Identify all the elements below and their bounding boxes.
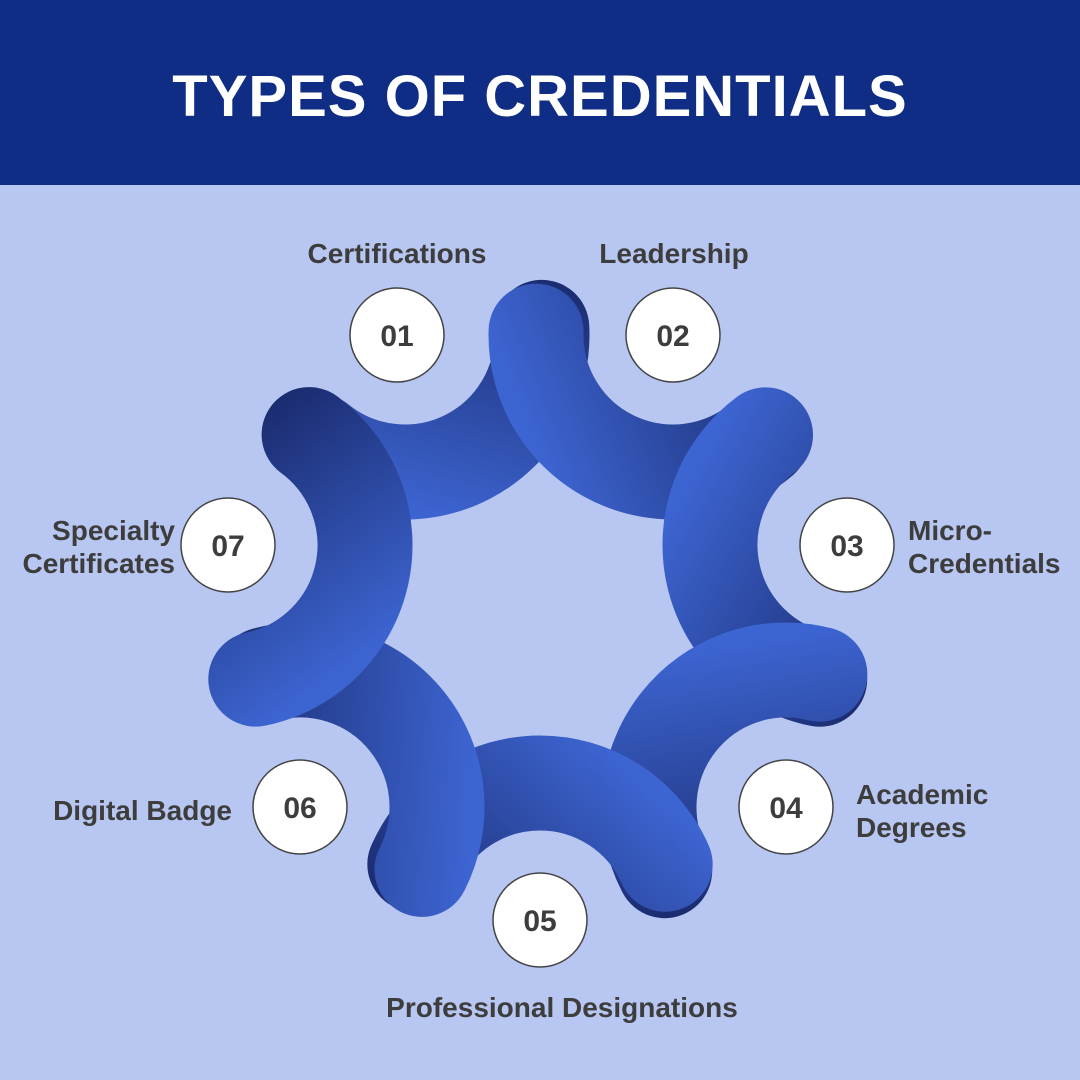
label: Leadership: Leadership <box>599 238 749 269</box>
label: Specialty Certificates: Certificates <box>22 548 175 579</box>
arc 06 <box>265 624 485 869</box>
arc 05 <box>415 783 665 864</box>
arc 02 <box>501 331 762 513</box>
number circles <box>181 288 894 967</box>
label: Professional Designations: Professional Designations <box>386 992 738 1023</box>
label: Micro-Credentials: Credentials <box>908 548 1060 579</box>
arc 01 <box>319 327 579 514</box>
circle 03 <box>800 498 894 592</box>
label: Certifications: Certifications <box>308 238 486 269</box>
circle 07 <box>181 498 275 592</box>
label: Specialty Certificates: Specialty <box>52 515 175 546</box>
arc 03 <box>686 435 820 697</box>
header banner <box>0 0 1080 185</box>
circle 07: 07 <box>211 530 245 563</box>
circle 04 <box>739 760 833 854</box>
circle 01 <box>350 288 444 382</box>
label: Academic Degrees <box>856 779 988 843</box>
title: TYPES OF CREDENTIALS <box>172 64 908 129</box>
label: Academic Degrees: Academic <box>856 779 988 810</box>
circle 03: 03 <box>830 530 864 563</box>
label: Micro-Credentials: Micro- <box>908 515 992 546</box>
circle 06 <box>253 760 347 854</box>
arc 07 <box>256 435 389 696</box>
label: Academic Degrees: Degrees <box>856 812 967 843</box>
arc 04 <box>601 624 820 871</box>
label: Micro-Credentials <box>908 515 1060 579</box>
label: Digital Badge: Digital Badge <box>53 795 232 826</box>
label: Specialty Certificates <box>22 515 175 579</box>
circle 01: 01 <box>380 320 414 353</box>
circle 02 <box>626 288 720 382</box>
circle 05: 05 <box>523 905 557 938</box>
circle 02: 02 <box>656 320 690 353</box>
circle 05 <box>493 873 587 967</box>
circle 04: 04 <box>769 792 803 825</box>
circle 06: 06 <box>283 792 317 825</box>
